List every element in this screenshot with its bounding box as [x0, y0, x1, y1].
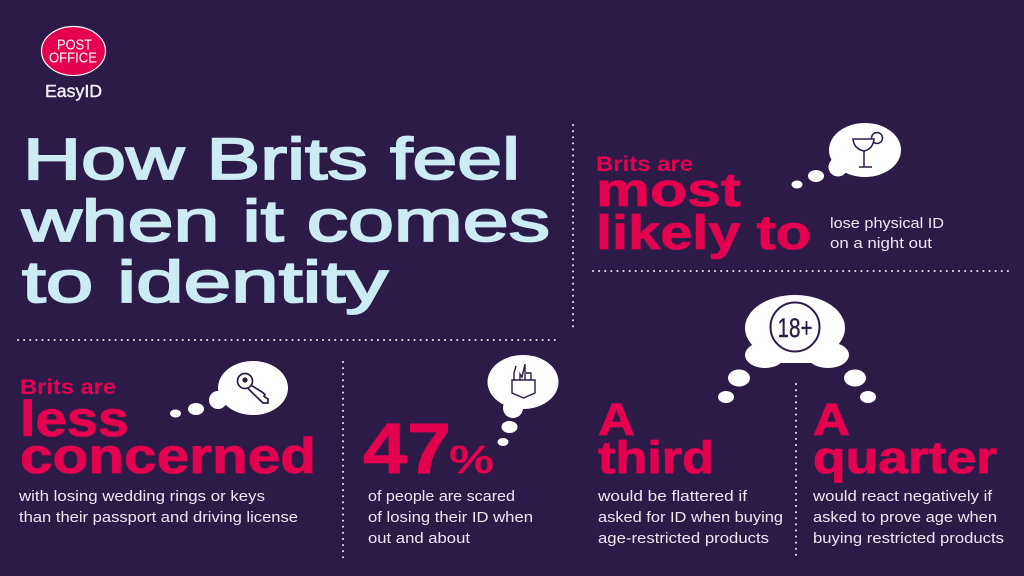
icon: cocktail thought bubble: [792, 123, 901, 188]
heading: most likely to: most: [596, 163, 741, 216]
text: react negatively: would react negatively if: [812, 489, 993, 505]
text: flattered: age-restricted products: [598, 531, 769, 547]
heading: a third: A: [598, 394, 635, 445]
icon: key thought bubble: [170, 361, 288, 418]
heading: a quarter: [813, 394, 997, 483]
heading: a quarter: quarter: [813, 432, 997, 483]
heading: a third: [598, 394, 714, 483]
text: scared of losing ID: [368, 489, 533, 547]
text: lose physical ID: lose physical ID: [830, 216, 944, 232]
text: lose physical ID: [830, 216, 944, 252]
text: wedding rings: with losing wedding rings or keys: [18, 489, 265, 505]
heading: most likely to: Brits are: [596, 153, 693, 176]
panel: most likely to: [596, 123, 944, 260]
panel: 47%: [363, 355, 558, 547]
stat: 47%: 47: [363, 410, 451, 489]
panel: a third: [597, 394, 783, 547]
heading: most likely to: [596, 153, 811, 260]
text: wedding rings: than their passport and driving license: [19, 510, 298, 526]
stat: 47%: %: [449, 438, 494, 482]
logo: Post Office EasyID: OFFICE: [49, 50, 97, 66]
title: to identity: [22, 250, 388, 315]
panel: less concerned: [18, 361, 316, 526]
logo: Post Office EasyID: EasyID: [45, 81, 102, 101]
panel: a quarter: [812, 394, 1004, 547]
heading: a quarter: A: [813, 394, 850, 445]
text: lose physical ID: on a night out: [830, 236, 932, 252]
text: react negatively: buying restricted products: [813, 531, 1004, 547]
heading: less concerned: [20, 376, 316, 484]
icon: 18+ thought bubble: 18+: [778, 313, 812, 343]
text: scared of losing ID: of people are scared: [368, 489, 515, 505]
text: flattered: [597, 489, 783, 547]
text: flattered: asked for ID when buying: [598, 510, 783, 526]
stat: 47%: [363, 410, 494, 489]
title: How Brits feel: [23, 127, 520, 192]
logo: Post Office EasyID: [42, 26, 106, 101]
text: wedding rings: [18, 489, 298, 526]
text: flattered: would be flattered if: [597, 489, 748, 505]
text: react negatively: asked to prove age when: [813, 510, 997, 526]
icon: pocket thought bubble: [488, 355, 558, 446]
heading: a third: third: [598, 432, 714, 483]
heading: most likely to: likely to: [596, 207, 811, 260]
logo: Post Office EasyID: POST: [57, 38, 92, 54]
text: react negatively: [812, 489, 1004, 547]
text: scared of losing ID: out and about: [368, 531, 470, 547]
heading: less concerned: Brits are: [20, 376, 116, 399]
icon: 18+ thought bubble: [718, 295, 876, 403]
heading: less concerned: concerned: [20, 428, 316, 484]
title: [21, 127, 550, 315]
title: when it comes: [21, 189, 550, 254]
text: scared of losing ID: of losing their ID when: [368, 510, 533, 526]
heading: less concerned: less: [20, 391, 129, 447]
